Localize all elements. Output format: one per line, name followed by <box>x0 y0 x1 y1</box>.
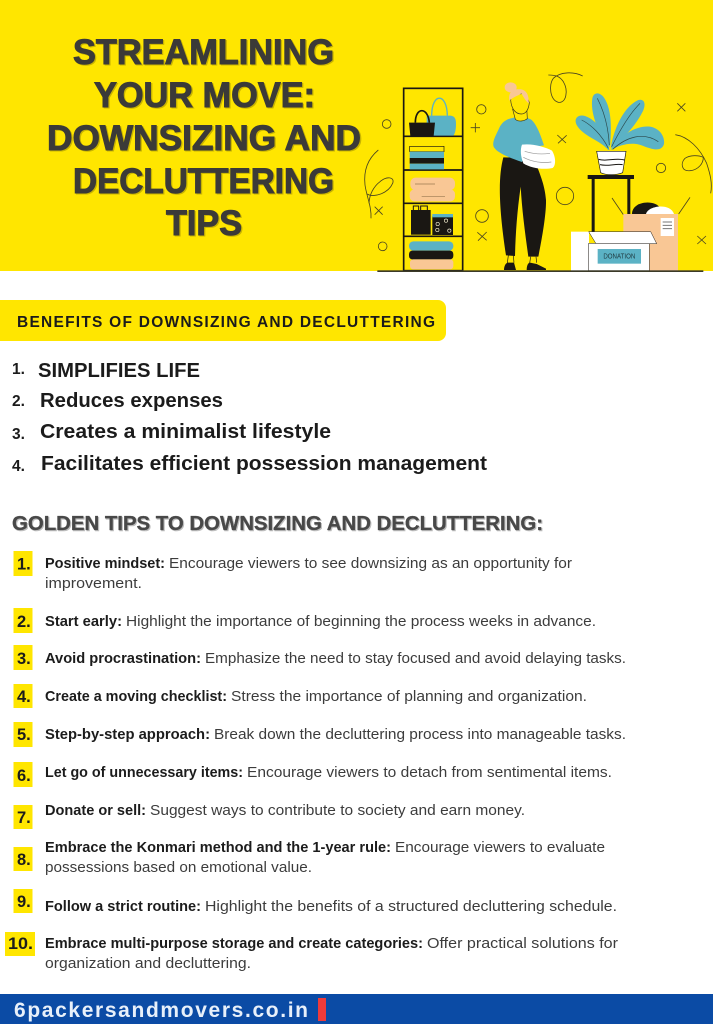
tip 7: Suggest ways to contribute to society and earn money. <box>150 803 525 819</box>
tip 6: Let go of unnecessary items: <box>45 765 243 781</box>
tip 3: 3. <box>17 650 31 668</box>
tip 4: Create a moving checklist: <box>45 689 227 705</box>
decorative doodles <box>365 73 711 251</box>
tip 7 <box>14 803 525 829</box>
tip 7: 7. <box>17 809 31 827</box>
benefits list: Reduces expenses <box>40 390 223 412</box>
benefits list: 4. <box>12 458 25 475</box>
moving box <box>612 197 690 271</box>
tip 4: Stress the importance of planning and organization. <box>231 689 587 705</box>
footer bar <box>0 994 713 1024</box>
title <box>47 33 362 244</box>
tip 3 <box>14 645 626 670</box>
tip 10: 10. <box>8 935 33 953</box>
header banner <box>0 0 713 271</box>
golden tips heading: GOLDEN TIPS TO DOWNSIZING AND DECLUTTERING: <box>13 514 544 536</box>
benefits list: Creates a minimalist lifestyle <box>40 421 331 443</box>
tip 8: Encourage viewers to evaluate <box>395 840 605 856</box>
footer bar: 6packersandmovers.co.in <box>14 999 308 1022</box>
title: STREAMLINING <box>74 34 335 73</box>
tip 8: Embrace the Konmari method and the 1-year rule: <box>45 840 391 856</box>
donation box: DONATION <box>603 254 635 261</box>
tip 4 <box>14 684 587 708</box>
tip 8 <box>14 840 605 876</box>
tip 9: 9. <box>17 893 31 911</box>
tip 9 <box>14 889 617 915</box>
tip 2 <box>14 608 596 633</box>
tip 5: Break down the decluttering process into manageable tasks. <box>214 727 626 743</box>
tip 4: 4. <box>17 688 31 706</box>
tip 6: 6. <box>17 767 31 785</box>
tip 6 <box>14 762 612 787</box>
benefits heading pill <box>0 300 446 341</box>
benefits list: SIMPLIFIES LIFE <box>38 360 200 382</box>
title: STREAMLINING <box>73 33 334 72</box>
tip 3: Emphasize the need to stay focused and avoid delaying tasks. <box>205 651 626 667</box>
tip 6: Encourage viewers to detach from sentimental items. <box>247 765 612 781</box>
illustration: woman organising belongings <box>365 73 711 272</box>
tip 2: 2. <box>17 613 31 631</box>
tip 8: 8. <box>17 851 31 869</box>
title: DOWNSIZING AND <box>48 120 362 159</box>
tip 1 <box>14 551 572 592</box>
tip 5: Step-by-step approach: <box>45 727 210 743</box>
title: DECLUTTERING <box>74 163 335 202</box>
title: DOWNSIZING AND <box>47 119 361 158</box>
benefits list <box>12 360 487 475</box>
tip 1: Positive mindset: <box>45 556 165 572</box>
benefits heading pill: BENEFITS OF DOWNSIZING AND DECLUTTERING <box>17 314 435 331</box>
donation box <box>571 232 657 271</box>
tip 10: Embrace multi-purpose storage and create categories: <box>45 936 423 952</box>
side table <box>588 175 634 232</box>
floor line <box>377 270 703 272</box>
tip 9: Follow a strict routine: <box>45 899 201 915</box>
title: TIPS <box>167 205 243 244</box>
tip 8: possessions based on emotional value. <box>45 860 312 876</box>
tip 1: Encourage viewers to see downsizing as an opportunity for <box>169 556 572 572</box>
woman <box>493 82 555 270</box>
tip 3: Avoid procrastination: <box>45 651 201 667</box>
tip 9: Highlight the benefits of a structured decluttering schedule. <box>205 899 617 915</box>
benefits list: 3. <box>12 426 25 443</box>
tip 10 <box>5 932 618 972</box>
title: TIPS <box>166 204 242 243</box>
benefits list: Facilitates efficient possession management <box>41 453 487 475</box>
benefits list: 1. <box>12 361 25 378</box>
tip 5 <box>14 722 626 747</box>
tip 10: organization and decluttering. <box>45 956 251 972</box>
title: YOUR MOVE: <box>95 77 316 116</box>
tip 7: Donate or sell: <box>45 803 146 819</box>
potted plant <box>576 93 664 175</box>
tip 1: 1. <box>17 556 31 574</box>
tip 2: Highlight the importance of beginning the process weeks in advance. <box>126 614 596 630</box>
tip 2: Start early: <box>45 614 122 630</box>
title: YOUR MOVE: <box>94 76 315 115</box>
benefits list: 2. <box>12 393 25 410</box>
title: DECLUTTERING <box>73 162 334 201</box>
golden tips heading: GOLDEN TIPS TO DOWNSIZING AND DECLUTTERING: <box>12 513 543 535</box>
tip 10: Offer practical solutions for <box>427 936 618 952</box>
tip 5: 5. <box>17 726 31 744</box>
tip 1: improvement. <box>45 576 142 592</box>
shelf unit <box>404 88 463 271</box>
